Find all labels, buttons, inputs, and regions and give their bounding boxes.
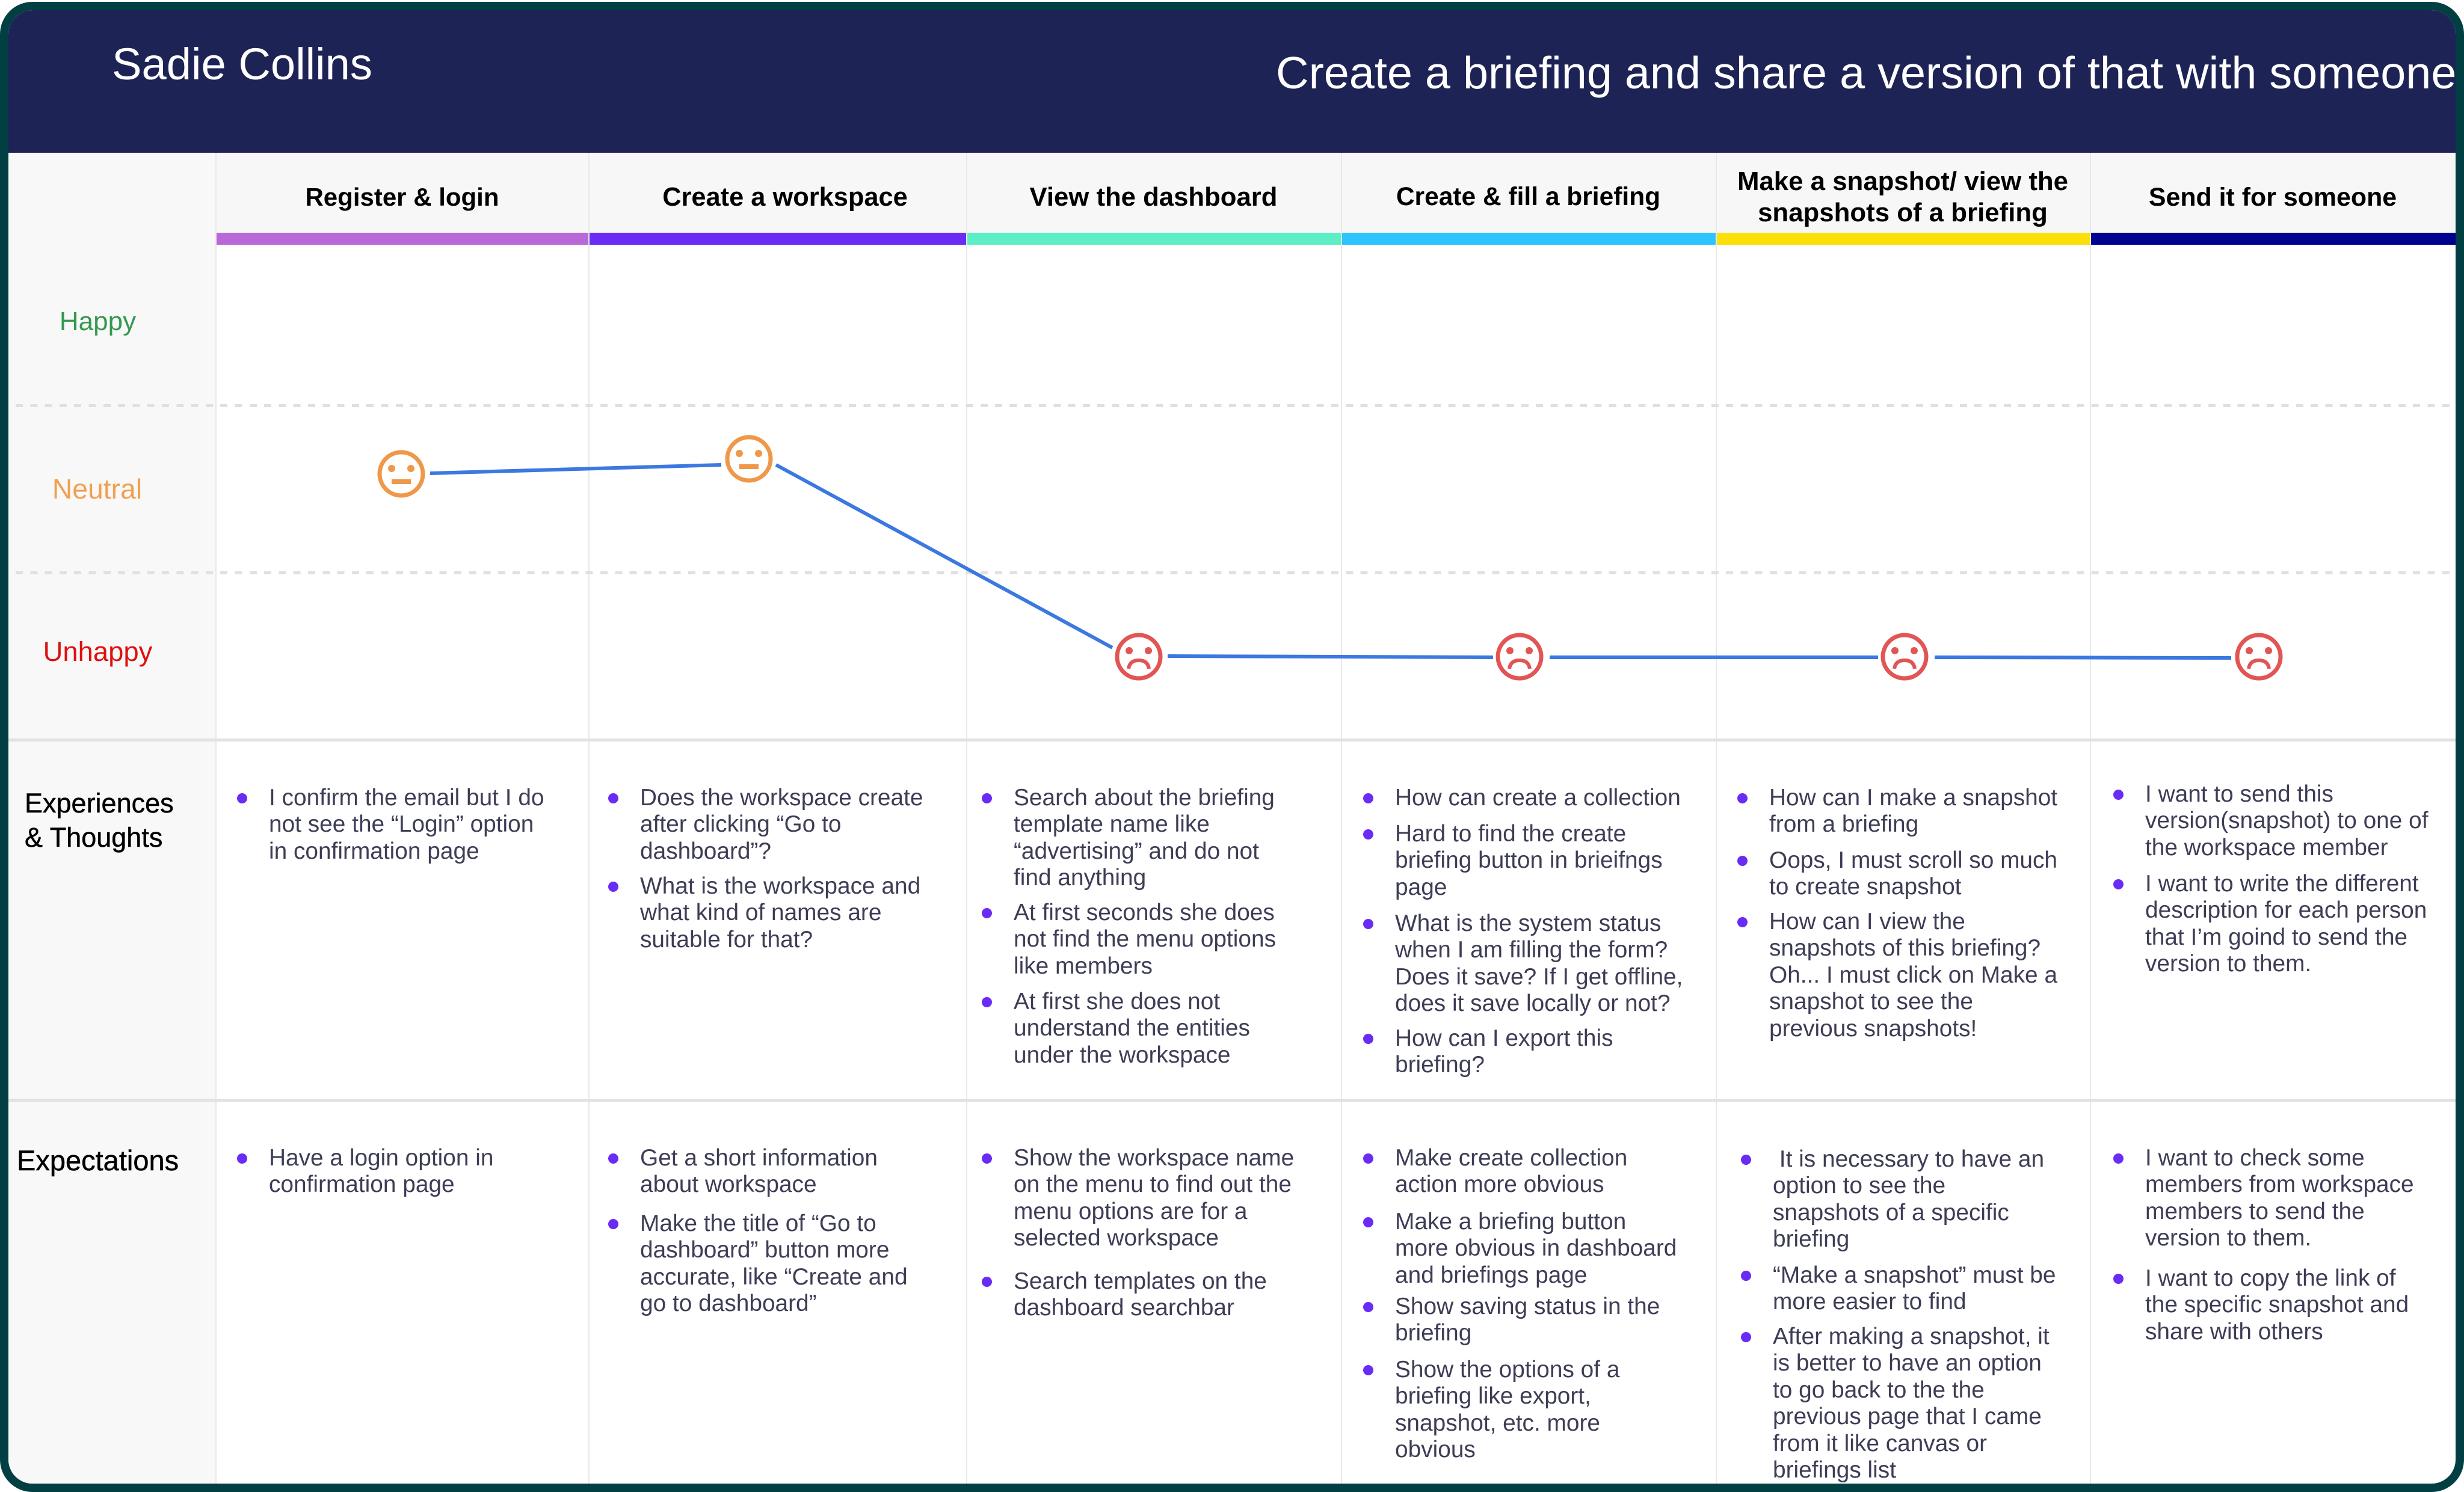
stage heading: Register & login: Register & login (305, 183, 499, 210)
experience: make a snapshot: from a briefing (1769, 811, 1918, 837)
expectation: collection action (1363, 1145, 1627, 1197)
expectation: easier to find (1741, 1262, 2056, 1315)
experience: menu options: At first seconds she does (1014, 900, 1275, 926)
row heading: Experiences & Thoughts (25, 788, 174, 853)
experience: view snapshots: snapshots of this briefing? (1769, 935, 2040, 961)
stage colour bar: purple (215, 233, 588, 245)
experience: Register & login: I confirm the email but I do (269, 785, 544, 811)
experience: create briefing button: Hard to find the create (1395, 821, 1626, 847)
expectation: go back option: briefings list (1773, 1457, 1896, 1483)
emotion label: Happy: Happy (60, 307, 136, 336)
icon: neutral face, Create a workspace (727, 437, 771, 480)
expectation: go back option: from it like canvas or (1773, 1431, 1987, 1457)
stage heading: Register & login (216, 153, 588, 233)
stage heading: Create & fill a briefing (1341, 153, 1716, 233)
expectation: see snapshots: It is necessary to have an (1779, 1146, 2044, 1172)
experience: Register & login: in confirmation page (269, 838, 479, 864)
experience: description per person: I want to write the different (2145, 871, 2419, 897)
experience: menu options: like members (1014, 953, 1153, 979)
expectation: briefing options: snapshot, etc. more (1395, 1410, 1600, 1436)
expectation: briefing button (1363, 1209, 1677, 1288)
expectation: briefing options: Show the options of a (1395, 1357, 1619, 1383)
stage heading: Send it for someone: Send it for someone (2149, 183, 2397, 212)
experience: view snapshots: Oh... I must click on Make a (1769, 962, 2057, 988)
experience: system status: Does it save? If I get offline, (1395, 964, 1683, 990)
expectation: search templates: dashboard searchbar (1014, 1295, 1234, 1321)
stage heading: Create a workspace (588, 153, 966, 233)
expectation: see snapshots: snapshots of a specific (1773, 1200, 2009, 1226)
expectation: briefing options (1363, 1357, 1619, 1463)
stage heading: Make a snapshot (1716, 153, 2090, 233)
emotion label: Unhappy: Unhappy (43, 636, 152, 667)
experience: create collection: How can create a collection (1395, 785, 1681, 811)
experience: workspace creation: after clicking “Go to (640, 811, 841, 837)
expectation: login option: confirmation page (269, 1171, 455, 1197)
expectation: copy link (2113, 1265, 2409, 1345)
stage heading: View the dashboard (966, 153, 1341, 233)
expectation: button title: Make the title of “Go to (640, 1211, 876, 1236)
header band (0, 0, 2464, 153)
experience: menu options: not find the menu options (1014, 926, 1276, 952)
experience: workspace creation: Does the workspace create (640, 785, 923, 811)
row heading: Experiences & Thoughts: & Thoughts (25, 822, 162, 853)
expectation: button title: go to dashboard” (640, 1291, 817, 1316)
experience: create briefing button (1363, 821, 1663, 900)
expectation: button title (608, 1211, 908, 1316)
expectation: copy link: the specific snapshot and (2145, 1292, 2409, 1318)
experience: export (1363, 1025, 1613, 1078)
icon: neutral face, Register & login (380, 452, 423, 496)
stage colour bar: teal (967, 233, 1341, 245)
icon: sad face, View the dashboard (1117, 635, 1160, 678)
experience: make a snapshot: How can I make a snapshot (1769, 785, 2057, 811)
experience: send version: the workspace member (2145, 835, 2388, 861)
expectation: copy link: share with others (2145, 1319, 2323, 1345)
expectation: collection action: action more obvious (1395, 1171, 1604, 1197)
expectation: search templates: Search templates on the (1014, 1268, 1267, 1294)
experience: entities: understand the entities (1014, 1015, 1250, 1041)
expectation: workspace name on menu: menu options are for a (1014, 1199, 1248, 1224)
expectation: briefing options: obvious (1395, 1437, 1476, 1463)
stage heading: Make a snapshot: Make a snapshot/ view the (1737, 166, 2068, 196)
expectation: workspace name on menu (982, 1145, 1294, 1251)
experience: template search: template name like (1014, 811, 1210, 837)
expectation: briefing button: more obvious in dashboard (1395, 1235, 1677, 1261)
experience: workspace names: What is the workspace and (640, 873, 920, 899)
experience: entities (982, 989, 1250, 1068)
experience: template search (982, 785, 1275, 891)
stage heading: View the dashboard: View the dashboard (1030, 182, 1277, 212)
experience: create briefing button: page (1395, 874, 1447, 900)
expectation: saving status (1363, 1294, 1660, 1346)
experience: Register & login (237, 785, 544, 864)
row heading: Experiences & Thoughts: Experiences (25, 788, 174, 818)
expectation: check members (2113, 1145, 2414, 1251)
experience: description per person: version to them. (2145, 951, 2311, 977)
expectation: check members: members to send the (2145, 1199, 2365, 1224)
expectation: see snapshots: briefing (1773, 1226, 1849, 1252)
expectation: workspace name on menu: Show the workspace name (1014, 1145, 1294, 1171)
expectation: workspace name on menu: on the menu to find out the (1014, 1171, 1292, 1197)
experience: template search: “advertising” and do not (1014, 838, 1259, 864)
stage heading: Create & fill a briefing: Create & fill a briefing (1396, 183, 1660, 210)
expectation: copy link: I want to copy the link of (2145, 1265, 2396, 1291)
expectation: saving status: Show saving status in the (1395, 1294, 1660, 1319)
experience: view snapshots: snapshot to see the (1769, 989, 1973, 1015)
experience: template search: Search about the briefing (1014, 785, 1275, 811)
expectation: saving status: briefing (1395, 1320, 1471, 1346)
experience: scrolling: Oops, I must scroll so much (1769, 847, 2057, 873)
experience: send version (2113, 781, 2429, 861)
icon: sad face, Make a snapshot (1883, 635, 1926, 678)
expectation: collection action: Make create collection (1395, 1145, 1627, 1171)
experience: system status: What is the system status (1395, 910, 1661, 936)
expectation: button title: dashboard” button more (640, 1237, 889, 1263)
expectation: check members: version to them. (2145, 1225, 2311, 1251)
expectation: go back option (1741, 1324, 2050, 1483)
expectation: workspace info (608, 1145, 878, 1197)
experience: export: How can I export this (1395, 1025, 1613, 1051)
experience: make a snapshot (1737, 785, 2057, 837)
journey line (430, 465, 2231, 658)
experience: scrolling (1737, 847, 2057, 900)
experience: export: briefing? (1395, 1052, 1485, 1078)
stage heading: Make a snapshot: snapshots of a briefing (1758, 197, 2048, 227)
experience: menu options (982, 900, 1276, 979)
left label column (0, 153, 216, 1492)
persona name: Sadie Collins (112, 39, 372, 89)
experience: workspace names: suitable for that? (640, 927, 813, 953)
stage colour bar: violet (589, 233, 966, 245)
experience: send version: version(snapshot) to one of (2145, 808, 2429, 833)
experience: description per person: that I’m goind to send the (2145, 924, 2407, 950)
experience: Register & login: not see the “Login” option (269, 811, 534, 837)
stage heading: Create a workspace: Create a workspace (662, 183, 908, 212)
expectation: go back option: is better to have an option (1773, 1350, 2042, 1376)
experience: send version: I want to send this (2145, 781, 2333, 807)
journey title: Create a briefing and share a version of that with someone (1276, 48, 2456, 99)
experience: template search: find anything (1014, 865, 1146, 891)
expectation: see snapshots: option to see the (1773, 1173, 1945, 1199)
expectation: check members: members from workspace (2145, 1171, 2414, 1197)
expectation: see snapshots (1741, 1146, 2044, 1252)
expectation: briefing button: and briefings page (1395, 1262, 1587, 1288)
experience: workspace creation: dashboard”? (640, 838, 771, 864)
expectation: easier to find: more easier to find (1773, 1289, 1967, 1315)
expectation: workspace info: about workspace (640, 1171, 817, 1197)
experience: entities: under the workspace (1014, 1042, 1230, 1068)
experience: scrolling: to create snapshot (1769, 874, 1961, 900)
experience: system status (1363, 910, 1683, 1016)
expectation: button title: accurate, like “Create and (640, 1264, 908, 1290)
stage heading: Send it for someone (2090, 153, 2456, 233)
stage colour bar: sky blue (1341, 233, 1716, 245)
expectation: check members: I want to check some (2145, 1145, 2365, 1171)
experience: view snapshots: previous snapshots! (1769, 1016, 1977, 1042)
experience: system status: does it save locally or not? (1395, 990, 1671, 1016)
expectation: briefing options: briefing like export, (1395, 1383, 1591, 1409)
expectation: go back option: After making a snapshot, it (1773, 1324, 2050, 1349)
experience: description per person: description for each person (2145, 897, 2427, 923)
expectation: briefing button: Make a briefing button (1395, 1209, 1626, 1235)
experience: workspace names: what kind of names are (640, 900, 881, 926)
experience: system status: when I am filling the form? (1395, 937, 1668, 963)
expectation: login option (237, 1145, 493, 1197)
experience: view snapshots (1737, 909, 2057, 1042)
experience: create briefing button: briefing button in brieifngs (1395, 847, 1663, 873)
experience: workspace names (608, 873, 920, 953)
emotion label: Neutral: Neutral (52, 473, 142, 505)
experience: entities: At first she does not (1014, 989, 1220, 1015)
experience: workspace creation (608, 785, 923, 864)
expectation: go back option: to go back to the the (1773, 1377, 1985, 1403)
expectation: easier to find: “Make a snapshot” must be (1773, 1262, 2056, 1288)
expectation: login option: Have a login option in (269, 1145, 493, 1171)
experience: description per person (2113, 871, 2427, 977)
expectation: go back option: previous page that I came (1773, 1404, 2042, 1429)
icon: sad face, Create & fill a briefing (1498, 635, 1541, 678)
stage colour bar: navy (2090, 233, 2456, 245)
expectation: search templates (982, 1268, 1267, 1321)
expectation: workspace name on menu: selected workspace (1014, 1225, 1219, 1251)
row heading: Expectations: Expectations (17, 1144, 179, 1176)
experience: view snapshots: How can I view the (1769, 909, 1965, 935)
expectation: workspace info: Get a short information (640, 1145, 878, 1171)
icon: sad face, Send it for someone (2237, 635, 2281, 678)
stage colour bar: yellow (1716, 233, 2090, 245)
